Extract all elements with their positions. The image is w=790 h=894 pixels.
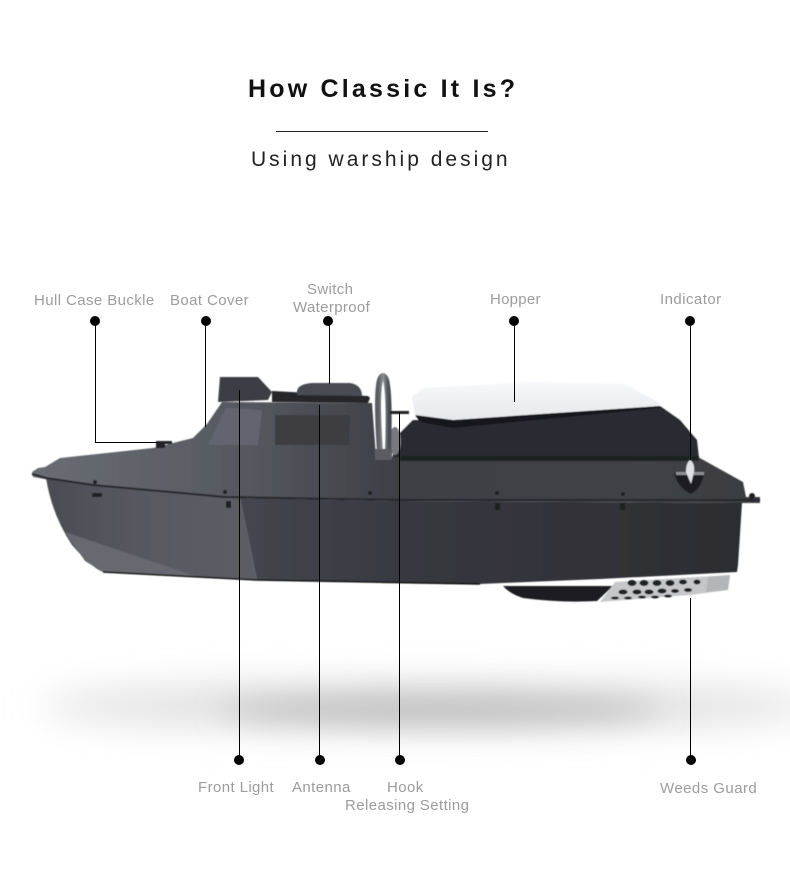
callout: Antenna: [292, 405, 351, 796]
callout: Indicator: Indicator: [660, 291, 722, 308]
cabin side panel: [208, 408, 262, 445]
boat: [32, 376, 760, 602]
subtitle: Using warship design: [251, 148, 511, 171]
ground shadow: [40, 684, 790, 728]
callout: Boat Cover: [170, 292, 249, 427]
hull front: [46, 478, 257, 580]
callout: Switch Waterproof: Switch: [307, 281, 353, 298]
hook bulb: [389, 427, 401, 455]
callout: Hook Releasing Setting: [345, 412, 469, 814]
callout: Front Light: [198, 390, 275, 796]
callout: Boat Cover: Boat Cover: [170, 292, 249, 309]
callout: Antenna: Antenna: [292, 779, 351, 796]
title rule: [276, 131, 488, 132]
weeds guard: [503, 575, 730, 602]
hopper lid: [412, 382, 660, 428]
hopper base: [392, 406, 699, 458]
hull rear: [240, 498, 742, 584]
front light housing: [218, 377, 272, 402]
deck and cabin body: [32, 402, 760, 503]
bottom edge: [103, 572, 480, 584]
callout: Hook Releasing Setting: Releasing Setting: [345, 797, 469, 814]
dark deck seam: [400, 456, 699, 461]
keel facet: [65, 532, 195, 576]
callout: Indicator: [660, 291, 722, 460]
callout: Weeds Guard: [660, 598, 757, 797]
callout: Front Light: Front Light: [198, 779, 275, 796]
title: How Classic It Is?: [248, 75, 518, 103]
callout: Weeds Guard: Weeds Guard: [660, 780, 757, 797]
hook arch: [378, 376, 389, 452]
callout: Hopper: Hopper: [490, 291, 541, 308]
callout: Switch Waterproof: [293, 281, 371, 384]
rim screws: [92, 441, 755, 510]
callout: Hopper: [490, 291, 541, 402]
callout: Switch Waterproof: Waterproof: [293, 299, 371, 316]
rim line: [32, 474, 760, 500]
release pin: [390, 411, 409, 414]
cabin window: [275, 415, 350, 445]
waterproof switch: [297, 383, 362, 396]
buckle: [156, 441, 165, 448]
callout: Hull Case Buckle: [34, 292, 158, 442]
indicator: [674, 460, 704, 494]
switch bar: [272, 391, 370, 403]
callout: Hook Releasing Setting: Hook: [387, 779, 424, 796]
callout: Hull Case Buckle: Hull Case Buckle: [34, 292, 155, 309]
